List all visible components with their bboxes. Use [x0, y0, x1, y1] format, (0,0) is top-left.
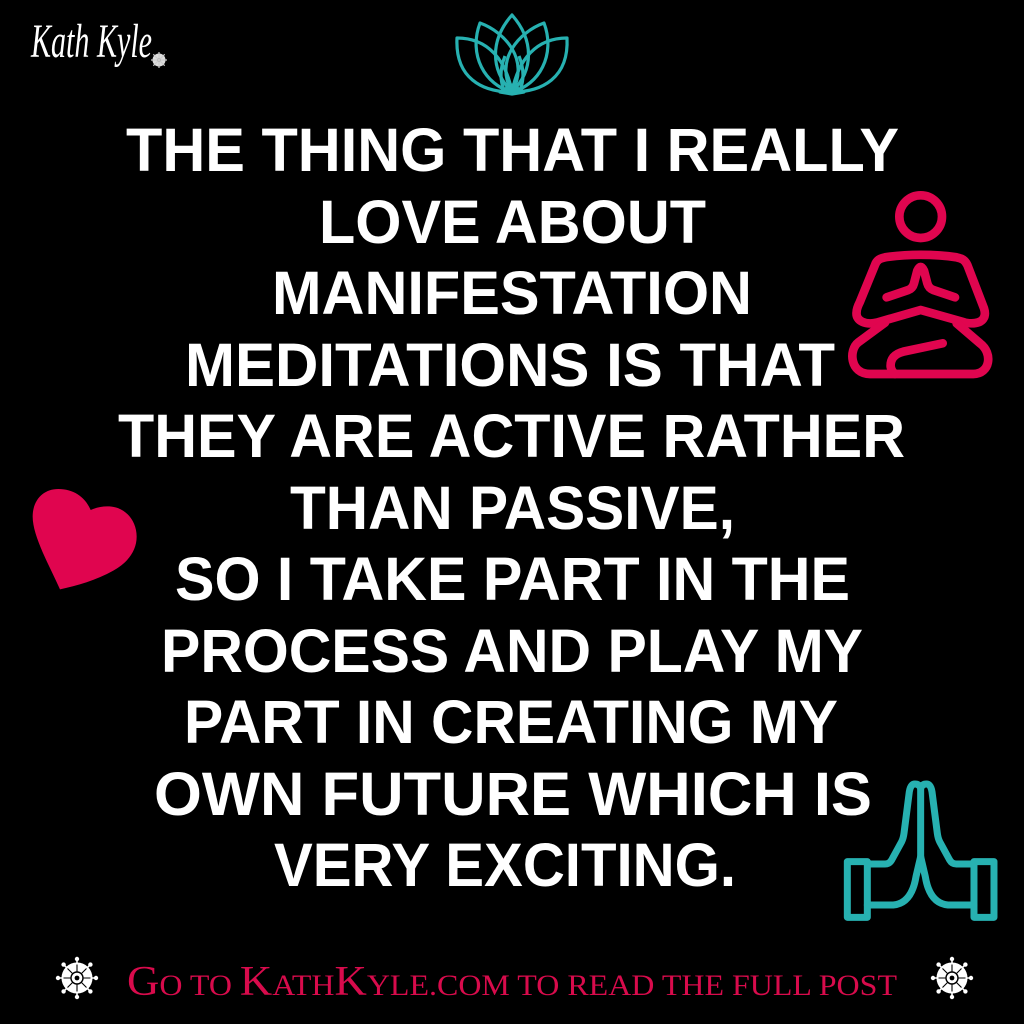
icon: left dharma wheel	[56, 957, 98, 999]
icon: heart	[33, 489, 137, 589]
heading: main quote: MANIFESTATION	[272, 259, 752, 327]
icon: meditating person	[852, 195, 988, 374]
heading: main quote: PROCESS AND PLAY MY	[161, 617, 863, 685]
logo: Kath Kyle signature: Kath Kyle	[30, 15, 152, 68]
footer call to action: GO TO KATHKYLE.COM TO READ THE FULL POST	[127, 959, 897, 1005]
heading: main quote: PART IN CREATING MY	[184, 688, 838, 756]
icon: teal lotus	[457, 15, 567, 94]
heading: main quote: OWN FUTURE WHICH IS	[154, 760, 872, 828]
icon: right dharma wheel	[931, 957, 973, 999]
heading: main quote: VERY EXCITING.	[274, 831, 736, 899]
heading: main quote: THE THING THAT I REALLY	[126, 116, 899, 184]
heading: main quote: THEY ARE ACTIVE RATHER	[118, 402, 905, 470]
icon: praying hands	[847, 784, 994, 917]
icon: small logo wheel	[151, 52, 167, 68]
heading: main quote	[118, 116, 905, 899]
heading: main quote: LOVE ABOUT	[319, 188, 706, 256]
heading: main quote: MEDITATIONS IS THAT	[185, 331, 835, 399]
heading: main quote: SO I TAKE PART IN THE	[175, 545, 850, 613]
heading: main quote: THAN PASSIVE,	[290, 474, 735, 542]
